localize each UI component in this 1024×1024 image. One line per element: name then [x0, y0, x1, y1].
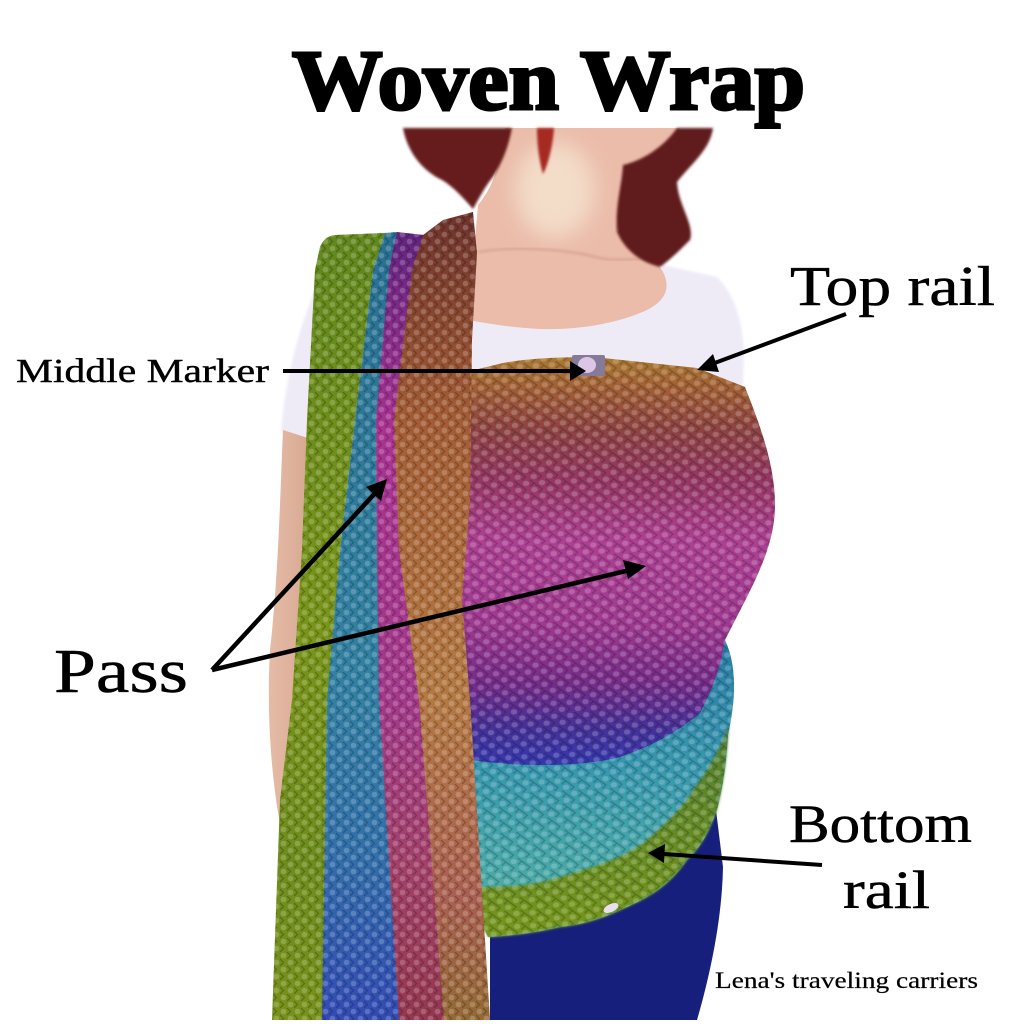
lower pass: weave texture [468, 640, 734, 937]
wrap: shoulder strips [272, 212, 490, 1020]
label: bottom rail [789, 794, 972, 920]
main pass fabric [462, 357, 775, 765]
bottom tag [602, 901, 620, 915]
neck crease [478, 249, 655, 260]
credit: Lena's traveling carriers [715, 968, 978, 993]
bare arm [269, 430, 330, 870]
label: top rail: Top rail [790, 256, 995, 318]
title: Woven Wrap [292, 32, 805, 128]
label: bottom rail: rail [843, 860, 930, 920]
strips weave texture [272, 212, 490, 1020]
label: bottom rail: Bottom [789, 794, 972, 854]
hair: right side [617, 128, 713, 267]
lower pass: green band [468, 725, 729, 937]
person wearing the wrap [269, 128, 744, 1020]
t-shirt [281, 265, 744, 445]
wrap: lower passes [468, 640, 734, 937]
arrows: pass [212, 479, 646, 670]
strip: magenta [376, 232, 445, 1020]
strip: orange [394, 212, 490, 1020]
arrow: middle marker [283, 361, 586, 381]
hair: strand on neck [537, 128, 554, 174]
neck and chest [468, 128, 680, 329]
main pass weave texture [462, 357, 775, 765]
label: pass: Pass [54, 638, 188, 706]
arrow: bottom rail [648, 844, 822, 865]
navy leggings [490, 810, 723, 1020]
strip: green [272, 233, 385, 1020]
arrow: top rail [697, 314, 846, 372]
lower pass: teal [468, 640, 734, 937]
middle marker tag [572, 355, 605, 376]
strip: blue [322, 232, 400, 1020]
wrap: main horizontal pass [462, 357, 775, 765]
neck highlight [515, 142, 595, 238]
label: middle marker: Middle Marker [16, 353, 270, 390]
hair: left side [403, 128, 512, 209]
